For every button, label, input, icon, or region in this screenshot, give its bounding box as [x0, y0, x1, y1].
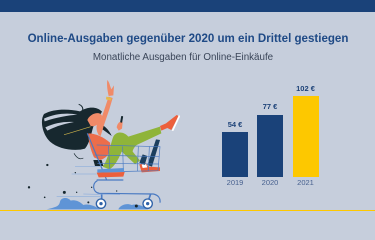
- bar 2019: [222, 132, 248, 176]
- bar 2020: [257, 115, 283, 176]
- cart base red tray: [97, 172, 125, 177]
- illustration: woman riding a shopping cart: [28, 80, 180, 210]
- splash under the cart: [47, 198, 148, 209]
- year 2019: 2019: [227, 178, 243, 187]
- value 2020: 77 €: [263, 102, 277, 111]
- torso shirt: [88, 133, 110, 160]
- arm raised and hand: [87, 80, 114, 136]
- bottom yellow line: [0, 210, 375, 211]
- trousers: [103, 127, 161, 169]
- shoe lower: [139, 163, 160, 172]
- subtitle: Monatliche Ausgaben für Online-Einkäufe: [93, 52, 273, 63]
- bracelet: [106, 97, 112, 101]
- phone and hand: [117, 116, 123, 131]
- year 2021: 2021: [297, 178, 314, 187]
- bar chart: [222, 84, 319, 187]
- top band: [0, 0, 375, 12]
- value 2021: 102 €: [296, 84, 315, 93]
- year 2020: 2020: [262, 178, 278, 187]
- hair: [42, 104, 112, 159]
- cart: [57, 133, 160, 203]
- shoe upper: [160, 115, 180, 131]
- bar 2021: [292, 96, 318, 176]
- dark package in cart: [93, 139, 160, 167]
- value 2019: 54 €: [228, 120, 242, 129]
- title: Online-Ausgaben gegenüber 2020 um ein Drittel gestiegen: [28, 33, 348, 45]
- wheels: [96, 198, 153, 209]
- dust particles: [28, 164, 138, 208]
